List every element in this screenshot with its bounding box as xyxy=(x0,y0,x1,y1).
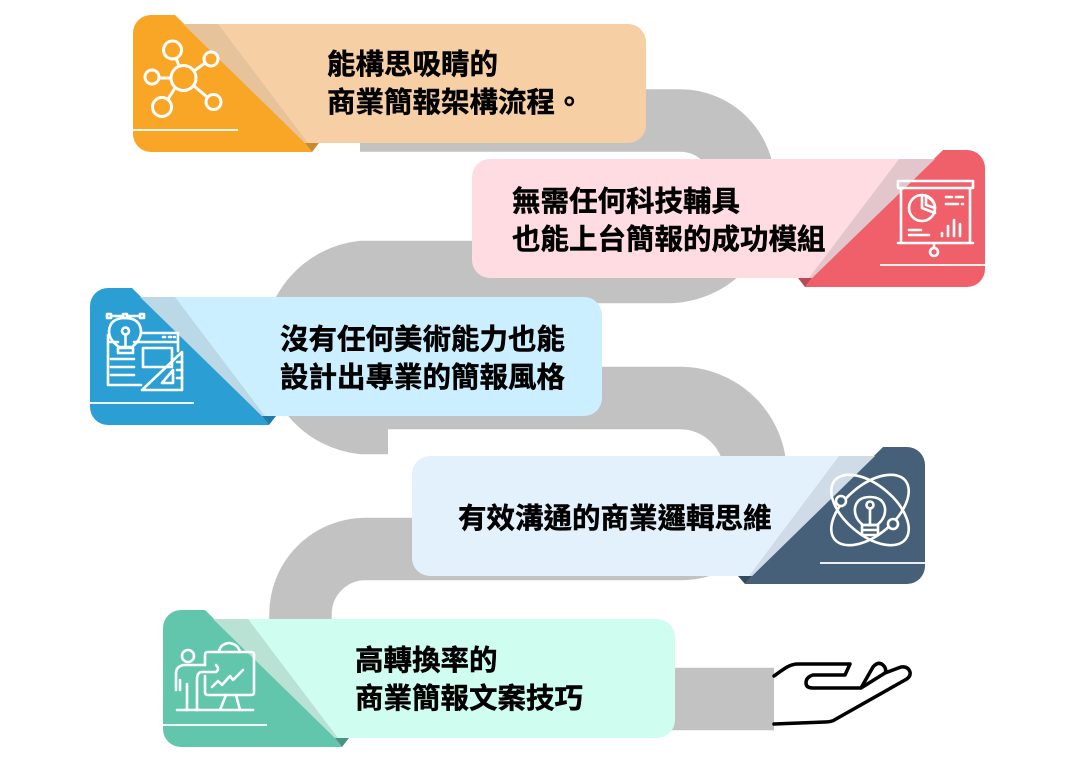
icon: network nodes xyxy=(145,41,221,116)
panel: step 1 orange: 商業簡報架構流程。 xyxy=(327,87,584,119)
icon: presentation board xyxy=(898,181,973,256)
fold tip xyxy=(738,576,752,584)
icon: presenter at chart board xyxy=(176,643,254,710)
panel: step 2 red: 也能上台簡報的成功模組 xyxy=(512,223,826,256)
fold tip xyxy=(305,143,319,152)
fold shadow xyxy=(183,24,308,143)
fold tip xyxy=(798,278,812,287)
panel: step 1 orange xyxy=(133,15,646,152)
icon tab xyxy=(133,15,312,152)
icon tab xyxy=(805,150,985,287)
underline xyxy=(133,129,238,131)
card body xyxy=(140,297,602,416)
icon: atom with light bulb xyxy=(819,461,921,559)
panel: step 2 red xyxy=(472,150,985,287)
text: 能構思吸睛的 xyxy=(327,49,498,81)
fold tip xyxy=(262,416,276,425)
card body xyxy=(183,24,646,143)
winding grey road xyxy=(295,120,774,699)
icon: open hand xyxy=(774,663,910,724)
fold shadow xyxy=(809,159,935,278)
underline xyxy=(820,562,925,564)
fold tip xyxy=(335,738,349,747)
text: 有效溝通的商業邏輯思維 xyxy=(458,503,772,535)
card body xyxy=(213,619,675,738)
text: 高轉換率的 xyxy=(355,645,498,677)
icon tab xyxy=(90,288,269,425)
text: 無需任何科技輔具 xyxy=(512,185,740,218)
fold shadow xyxy=(140,297,265,416)
icon: design tools xyxy=(107,314,182,390)
panel: step 3 blue: 設計出專業的簡報風格 xyxy=(280,362,566,394)
panel: step 5 green: 商業簡報文案技巧 xyxy=(355,683,583,715)
underline xyxy=(880,264,985,266)
card body xyxy=(472,159,935,278)
text: 沒有任何美術能力也能 xyxy=(280,324,565,356)
panel: step 5 green xyxy=(163,610,675,747)
underline xyxy=(163,724,267,726)
panel: step 3 blue xyxy=(90,288,602,425)
icon tab xyxy=(745,447,925,584)
panel: step 4 navy xyxy=(412,447,925,584)
fold shadow xyxy=(749,456,875,576)
card body xyxy=(412,456,875,576)
underline xyxy=(90,402,194,404)
icon tab xyxy=(163,610,342,747)
fold shadow xyxy=(213,619,338,738)
